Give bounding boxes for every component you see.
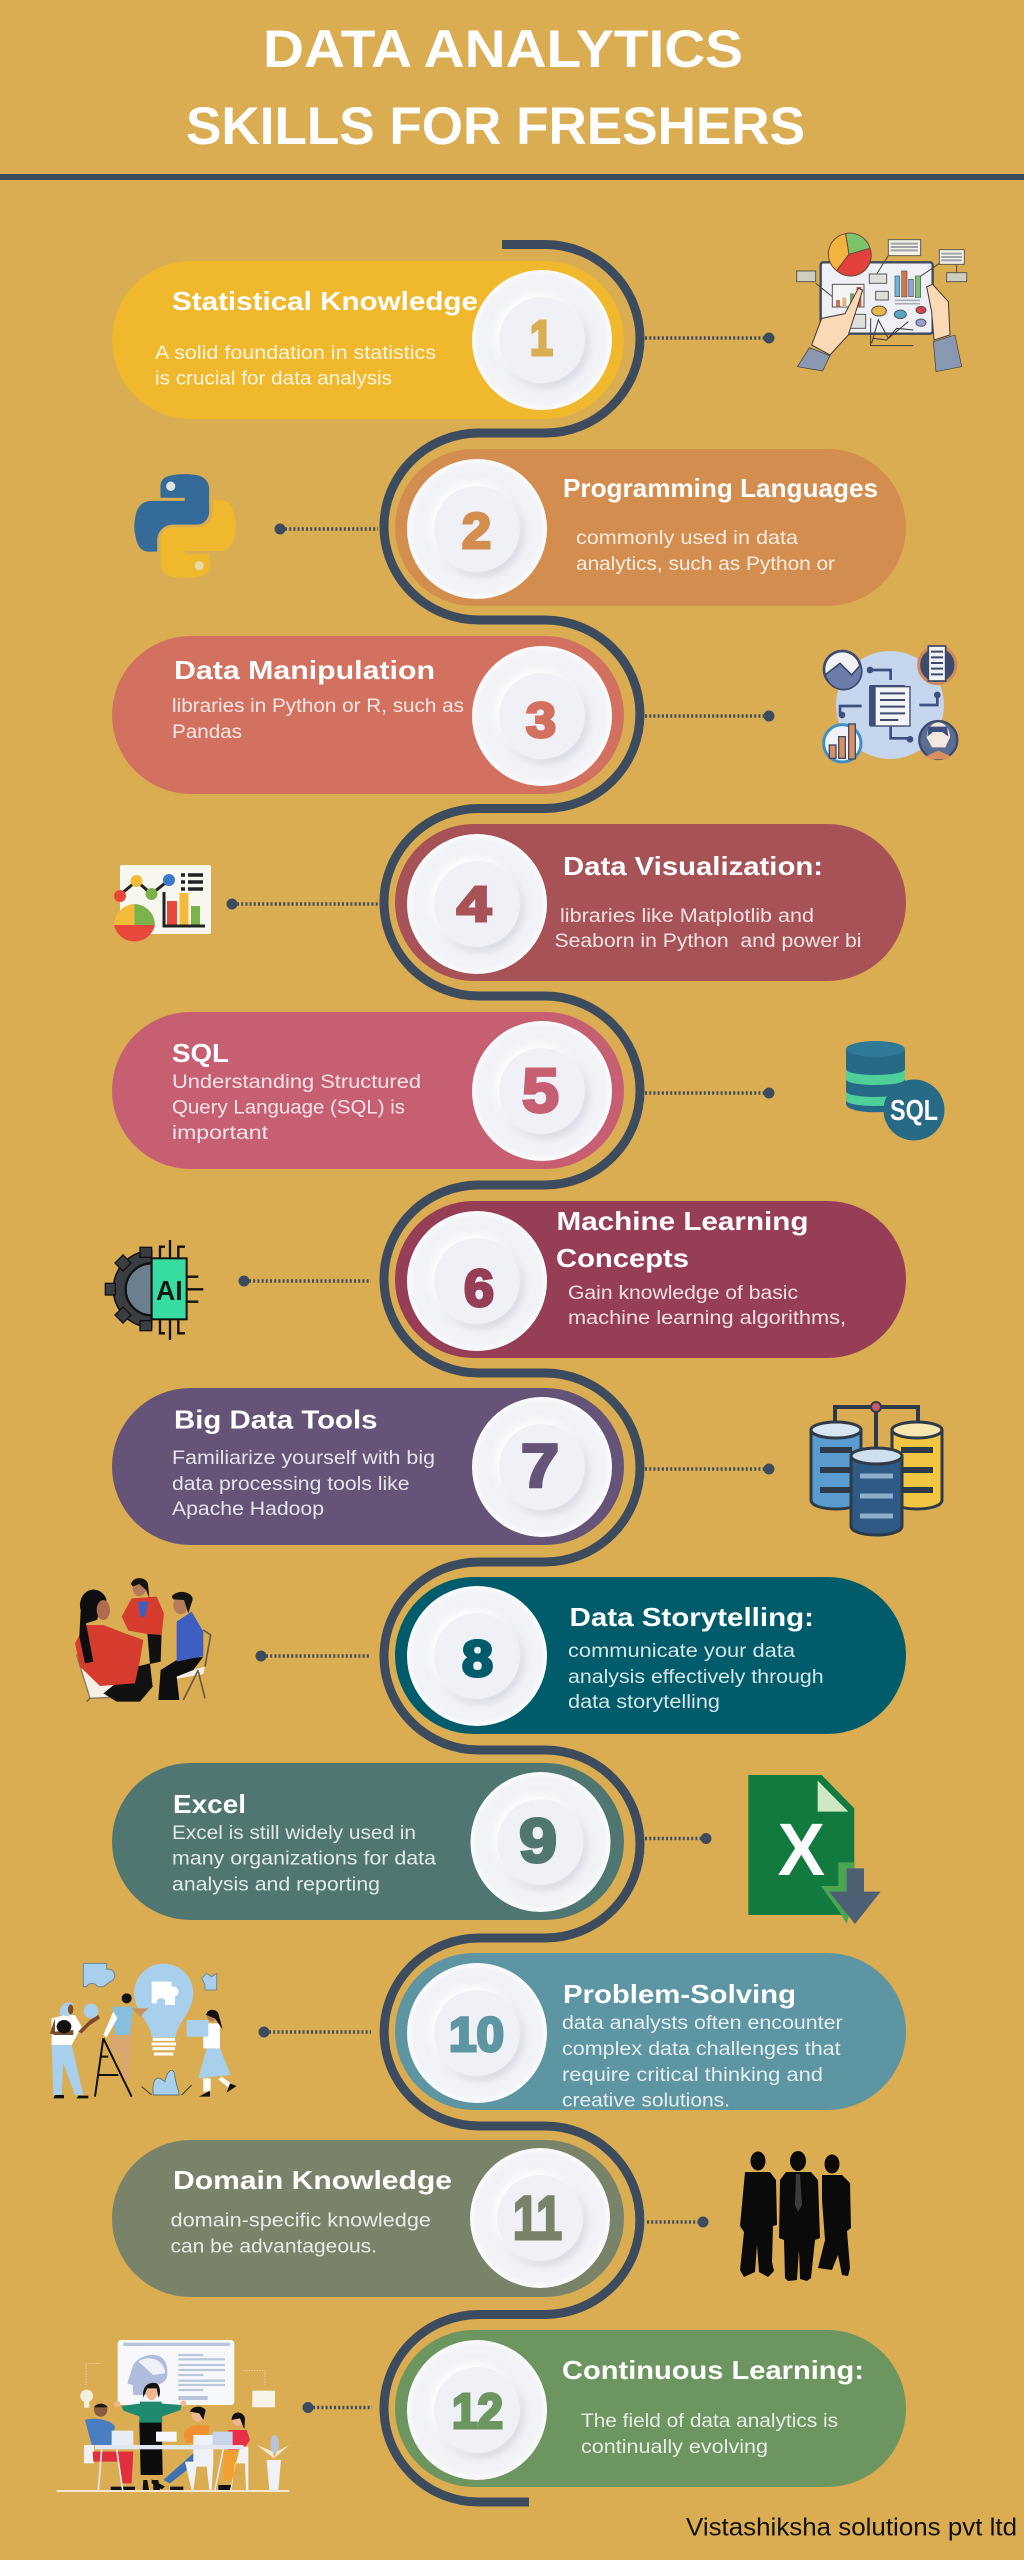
number 6: 6 — [464, 1260, 494, 1318]
number 1: 1 — [530, 312, 553, 366]
icon: team meeting with presenter — [57, 2340, 289, 2491]
connector 12 — [302, 2402, 372, 2413]
panel: 12 Continuous Learning — [395, 2330, 906, 2487]
body 8: data storytelling — [568, 1692, 720, 1713]
pill 10 — [395, 1953, 906, 2110]
body 10: creative solutions. — [562, 2091, 730, 2112]
icon: AI chip gear — [105, 1240, 203, 1340]
icon: connected database stacks — [811, 1402, 942, 1535]
body 5: important — [172, 1123, 269, 1144]
body 7: Familiarize yourself with big — [172, 1448, 435, 1469]
icon: SQL database: SQL — [890, 1095, 938, 1127]
heading 6: Machine Learning — [556, 1206, 808, 1236]
body 12 — [581, 2411, 838, 2458]
pill 11 — [112, 2140, 624, 2297]
body 2 — [576, 528, 836, 575]
body 11 — [170, 2211, 431, 2258]
body 8 — [568, 1641, 824, 1713]
body 7: Apache Hadoop — [172, 1499, 324, 1520]
body 10 — [562, 2013, 843, 2112]
heading 11: Domain Knowledge — [173, 2165, 452, 2195]
pill 6 — [395, 1201, 906, 1358]
body 10: require critical thinking and — [562, 2065, 823, 2086]
body 12: continually evolving — [581, 2437, 768, 2458]
icon: excel file download: X — [778, 1808, 825, 1891]
panel: 6 Machine Learning Concepts — [395, 1201, 906, 1358]
connector 2 — [274, 524, 378, 534]
pill 1 — [112, 261, 624, 419]
heading 9: Excel — [173, 1789, 246, 1819]
icon: dashboard charts — [114, 865, 211, 941]
body 3 — [172, 696, 464, 743]
body 2: analytics, such as Python or — [576, 554, 836, 575]
body 6: machine learning algorithms, — [568, 1308, 846, 1329]
number 11: 11 — [513, 2184, 562, 2252]
number 12: 12 — [452, 2385, 503, 2439]
body 4: Seaborn in Python and power bi — [554, 931, 862, 952]
number 2: 2 — [462, 503, 491, 559]
body 7 — [172, 1448, 435, 1520]
body 10: data analysts often encounter — [562, 2013, 843, 2034]
pill 4 — [395, 824, 906, 981]
panel: 8 Data Storytelling — [395, 1577, 906, 1734]
heading 3: Data Manipulation — [174, 655, 435, 685]
icon: document network — [824, 646, 957, 762]
pill 12 — [395, 2330, 906, 2487]
pill 5 — [112, 1012, 624, 1169]
heading 8: Data Storytelling: — [570, 1602, 814, 1632]
heading 7: Big Data Tools — [174, 1404, 378, 1434]
icon: three people talking — [75, 1578, 211, 1702]
panel: 9 Excel — [112, 1763, 624, 1920]
body 1: A solid foundation in statistics — [155, 343, 436, 364]
icon: tablet with charts held by hands — [797, 233, 967, 372]
number 5: 5 — [522, 1057, 559, 1126]
body 3: Pandas — [172, 722, 242, 743]
panel: 7 Big Data Tools — [112, 1388, 624, 1545]
heading 4: Data Visualization: — [563, 851, 823, 881]
connector 11 — [647, 2216, 708, 2228]
connector 4 — [226, 898, 378, 910]
body 9: many organizations for data — [172, 1849, 436, 1870]
body 8: communicate your data — [568, 1641, 795, 1662]
icon: team assembling idea bulb — [50, 1963, 237, 2098]
body 2: commonly used in data — [576, 528, 798, 549]
panel: 5 SQL — [112, 1012, 624, 1169]
connector 3 — [645, 710, 774, 722]
body 8: analysis effectively through — [568, 1667, 824, 1688]
panel: 1 Statistical Knowledge — [112, 261, 624, 419]
connector 9 — [645, 1833, 712, 1844]
heading 5: SQL — [172, 1038, 229, 1068]
icon: excel file download — [748, 1775, 881, 1924]
icon: business people silhouettes — [740, 2151, 851, 2281]
pill 2 — [395, 449, 906, 606]
body 5 — [172, 1072, 421, 1144]
heading 10: Problem-Solving — [563, 1979, 796, 2009]
number 4: 4 — [457, 878, 491, 932]
body 11: domain-specific knowledge — [170, 2211, 431, 2232]
connector 7 — [645, 1464, 774, 1474]
body 9: Excel is still widely used in — [172, 1823, 416, 1844]
number 3: 3 — [526, 694, 556, 748]
footer: company credit: Vistashiksha solutions pvt ltd — [686, 2514, 1017, 2542]
title — [186, 20, 805, 156]
pill 7 — [112, 1388, 624, 1545]
heading 1: Statistical Knowledge — [172, 286, 478, 316]
panel: 10 Problem-Solving — [395, 1953, 906, 2112]
panel: 11 Domain Knowledge — [112, 2140, 624, 2297]
body 9: analysis and reporting — [172, 1875, 380, 1896]
body 3: libraries in Python or R, such as — [172, 696, 464, 717]
body 6: Gain knowledge of basic — [568, 1283, 798, 1304]
body 12: The field of data analytics is — [581, 2411, 838, 2432]
body 1 — [155, 343, 436, 390]
panel: 3 Data Manipulation — [112, 636, 624, 794]
title: SKILLS FOR FRESHERS — [186, 97, 805, 156]
title: DATA ANALYTICS — [263, 20, 743, 79]
icon: SQL database — [846, 1041, 944, 1140]
heading 2: Programming Languages — [563, 473, 878, 503]
panel: 2 Programming Languages — [395, 449, 906, 606]
number 9: 9 — [519, 1807, 557, 1876]
body 5: Query Language (SQL) is — [172, 1098, 405, 1118]
number 8: 8 — [462, 1630, 493, 1687]
number 10: 10 — [449, 2009, 504, 2062]
body 9 — [172, 1823, 436, 1896]
connector 6 — [238, 1276, 371, 1286]
connector 5 — [645, 1088, 774, 1098]
heading 6: Concepts — [556, 1243, 689, 1273]
icon: python logo — [134, 474, 236, 578]
body 4 — [554, 906, 862, 952]
pill 3 — [112, 636, 624, 794]
serpentine connector path — [384, 244, 640, 2502]
heading 12: Continuous Learning: — [562, 2355, 864, 2385]
body 10: complex data challenges that — [562, 2039, 841, 2060]
icon: AI chip gear: AI — [156, 1275, 183, 1306]
connector 8 — [256, 1650, 371, 1662]
number 7: 7 — [521, 1432, 559, 1500]
body 6 — [568, 1283, 846, 1329]
pill 8 — [395, 1577, 906, 1734]
body 5: Understanding Structured — [172, 1072, 421, 1093]
body 4: libraries like Matplotlib and — [560, 906, 814, 927]
heading 6 — [556, 1206, 808, 1273]
pill 9 — [112, 1763, 624, 1920]
panel: 4 Data Visualization — [395, 824, 906, 981]
body 11: can be advantageous. — [170, 2237, 377, 2258]
connector 10 — [258, 2026, 371, 2038]
connector 1 — [645, 332, 774, 344]
body 7: data processing tools like — [172, 1474, 410, 1495]
body 1: is crucial for data analysis — [155, 368, 392, 390]
